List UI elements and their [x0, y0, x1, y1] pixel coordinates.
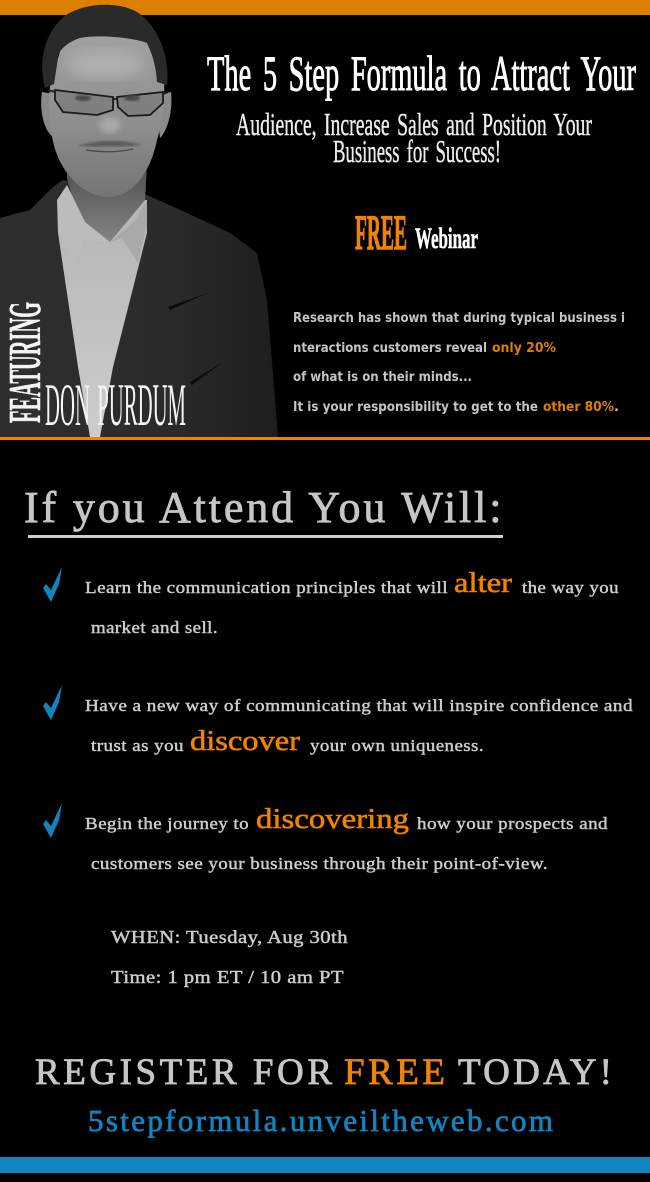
bullet 1: market and sell.	[91, 618, 218, 637]
ears	[41, 92, 171, 138]
subtitle: Business for Success!	[333, 133, 501, 169]
bullet 2: discover	[190, 725, 300, 757]
portrait: Don Purdum	[0, 5, 278, 437]
glasses	[48, 90, 168, 116]
bullet 2: your own uniqueness.	[310, 736, 484, 755]
register call to action: REGISTER FOR	[35, 1052, 332, 1093]
heading underline	[28, 535, 503, 538]
bullet 3	[43, 803, 608, 873]
research text block	[293, 311, 625, 415]
bullet 3: how your prospects and	[417, 814, 608, 833]
research text block: of what is on their minds...	[293, 370, 472, 385]
text: DON PURDUM	[45, 372, 186, 438]
shirt	[58, 200, 147, 437]
bullet 3: customers see your business through their point-of-view.	[91, 854, 548, 873]
research text block: other 80%	[543, 400, 614, 415]
bullet 2: Have a new way of communicating that will inspire confidence and	[85, 696, 633, 715]
free webinar label: Webinar	[415, 222, 478, 255]
research text block: only 20%	[492, 341, 556, 356]
icon: blue check	[43, 803, 62, 838]
neck	[67, 165, 147, 242]
icon: blue check	[43, 567, 62, 602]
register call to action	[35, 1052, 612, 1093]
bullet 3: Begin the journey to	[85, 814, 249, 833]
event date and time: WHEN: Tuesday, Aug 30th	[111, 927, 348, 947]
bullet 1: the way you	[522, 578, 619, 597]
icon: blue check	[43, 685, 62, 720]
text: FEATURING	[0, 302, 50, 423]
shirt collar	[57, 185, 110, 265]
jacket lapel creases	[168, 293, 223, 385]
face	[49, 35, 164, 197]
event date and time	[111, 927, 348, 987]
orange divider	[0, 437, 650, 440]
bullet 2	[43, 685, 633, 757]
website url: 5stepformula.unveiltheweb.com	[88, 1103, 553, 1138]
bullet 3: discovering	[256, 803, 409, 835]
jacket	[0, 180, 278, 437]
hair	[42, 5, 167, 88]
event date and time: Time: 1 pm ET / 10 am PT	[111, 967, 344, 987]
bullet 1: alter	[454, 567, 512, 599]
bullet 1	[43, 567, 619, 637]
register call to action: FREE	[344, 1052, 445, 1093]
research text block: It is your responsibility to get to the	[293, 400, 538, 415]
bullet 2: trust as you	[91, 736, 184, 755]
bullet 1: Learn the communication principles that will	[85, 578, 448, 597]
forehead highlight	[67, 49, 143, 79]
research text block: .	[614, 400, 619, 415]
register call to action: TODAY!	[458, 1052, 612, 1093]
subtitle	[236, 106, 592, 169]
research text block: nteractions customers reveal	[293, 341, 487, 356]
eyes, nose and mouth	[75, 95, 143, 152]
heading: If you Attend You Will:	[24, 483, 503, 532]
free webinar label: FREE	[355, 204, 407, 260]
top orange bar	[0, 0, 650, 15]
bottom blue bar	[0, 1157, 650, 1173]
